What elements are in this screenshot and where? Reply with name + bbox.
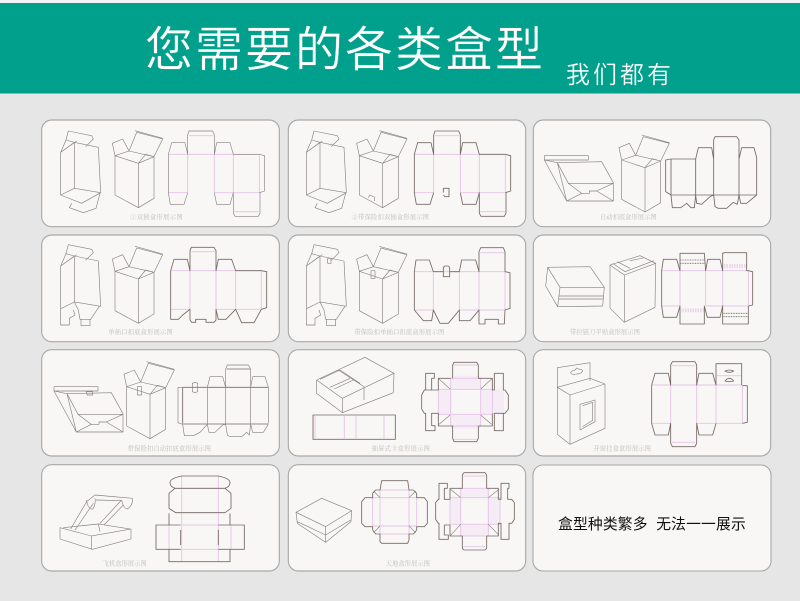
dieline one (362, 481, 427, 543)
caption: 天地盒形展示图 (386, 558, 430, 567)
panel: airplane box (42, 465, 279, 571)
dieline (168, 131, 265, 216)
card (42, 465, 279, 571)
caption: 带保险扣单插口扣底盒形展示图 (354, 327, 444, 336)
dieline (414, 248, 510, 324)
panel: lid and base box (288, 465, 526, 571)
caption: 带保险扣自动扣底盒形展示图 (128, 443, 211, 452)
3D box views (61, 131, 163, 213)
dieline (414, 131, 511, 216)
dieline (156, 476, 244, 562)
note text: 盒型种类繁多 无法一一展示 (558, 516, 746, 533)
3D box views (306, 245, 407, 326)
panel: auto lock bottom box (533, 120, 771, 227)
3D box views (313, 357, 395, 439)
3D box view (557, 363, 605, 444)
3D box views (61, 245, 163, 326)
caption: 飞机盒形展示图 (103, 558, 147, 567)
card (533, 465, 771, 571)
dieline (422, 362, 508, 442)
caption: ①双插盒形展示图 (130, 212, 183, 221)
panel: single tuck snap bottom box (42, 235, 279, 342)
card (42, 235, 279, 342)
3D box views (54, 362, 174, 439)
caption: 自动扣底盒形展示图 (600, 212, 657, 221)
card (533, 235, 771, 342)
panel: double tuck box (42, 120, 279, 227)
card (288, 465, 526, 571)
title: 您需要的各类盒型 (145, 24, 545, 77)
dieline (171, 247, 267, 323)
panel: window hanger box (533, 350, 771, 456)
caption: 单插口扣底盒形展示图 (108, 327, 173, 336)
3D box view (60, 495, 132, 549)
caption: ②带保险扣双插盒形展示图 (352, 212, 429, 221)
3D box views (546, 256, 656, 322)
panel: single tuck snap bottom box with safety lock (288, 235, 526, 342)
card (533, 120, 771, 227)
panel: note (533, 465, 771, 571)
3D box views (306, 131, 407, 213)
dieline two (436, 473, 514, 550)
dieline (666, 137, 757, 208)
panel: double tuck box with safety lock (288, 120, 526, 227)
header band (0, 0, 800, 94)
subtitle: 我们都有 (566, 62, 674, 89)
caption: 开窗挂盒盒形展示图 (593, 443, 651, 452)
card (288, 235, 526, 342)
panel: zipper tear strip box (533, 235, 771, 342)
card (288, 120, 526, 227)
dieline (652, 362, 747, 447)
dieline (178, 365, 268, 437)
card (42, 350, 279, 456)
caption: 抽屉式卡盒形展示图 (372, 443, 430, 452)
panel: auto lock bottom box with safety lock (42, 350, 279, 456)
card (42, 120, 279, 227)
card (533, 350, 771, 456)
dieline (662, 253, 753, 324)
card (288, 350, 526, 456)
3D box view (296, 498, 352, 542)
3D box views (544, 135, 669, 212)
panel: drawer box (288, 350, 526, 456)
caption: 带拉链刀平贴盒形展示图 (570, 327, 640, 336)
